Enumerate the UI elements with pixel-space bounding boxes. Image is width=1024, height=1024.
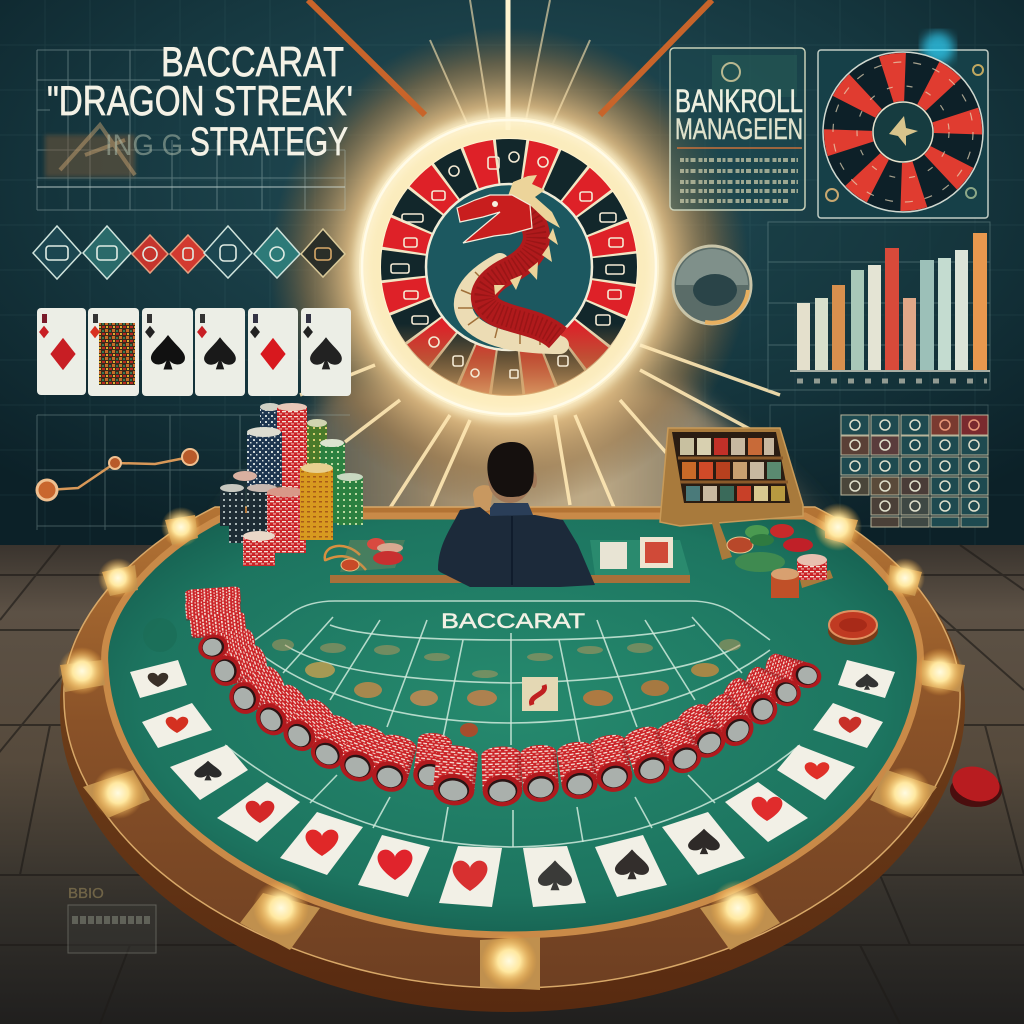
panel: bankroll management: BANKROLL xyxy=(675,83,803,119)
chip stacks left xyxy=(220,403,363,566)
glass orb xyxy=(673,246,751,324)
faint floor label xyxy=(68,885,156,953)
seated player xyxy=(330,442,690,587)
wooden chip tray right xyxy=(660,428,803,526)
schedule grid panel xyxy=(770,405,988,527)
betting layout markers xyxy=(272,639,741,737)
left grid panel behind title xyxy=(37,50,345,210)
title: STRATEGY xyxy=(190,120,348,164)
small card tray and right chips xyxy=(710,514,833,598)
floor xyxy=(0,545,1024,1024)
dragon xyxy=(457,175,560,345)
felt chips and cards left of player xyxy=(325,538,405,572)
faded dragon sketch behind title: ING G xyxy=(105,129,183,162)
betting layout xyxy=(225,601,800,847)
red chip on floor xyxy=(948,761,1004,807)
background grid pattern xyxy=(0,0,1024,545)
panel: bankroll management: MANAGEIEN xyxy=(675,113,803,146)
wheel segment labels xyxy=(391,152,624,378)
red chip roll arc xyxy=(185,586,824,807)
baccarat table xyxy=(60,507,965,1012)
rim lamps xyxy=(58,503,965,990)
table label: BACCARAT xyxy=(441,610,585,633)
wooden player board xyxy=(330,537,690,583)
faded dragon sketch behind title xyxy=(45,125,183,177)
panel: roulette wheel xyxy=(818,32,988,218)
loose red chip on felt xyxy=(828,611,878,645)
blurred body copy xyxy=(680,160,798,201)
card picture xyxy=(99,323,135,385)
wheel segments xyxy=(394,152,624,382)
title xyxy=(47,38,353,164)
card arc on table xyxy=(130,660,895,907)
diamond icons row xyxy=(33,226,345,279)
bar chart xyxy=(768,222,990,390)
playing cards row xyxy=(37,308,351,396)
panel: bankroll management xyxy=(670,48,805,210)
title: BACCARAT xyxy=(161,38,344,85)
background wall xyxy=(0,0,1024,560)
left line chart panel xyxy=(37,415,350,530)
dragon wheel xyxy=(361,119,657,415)
wheel glow and rays xyxy=(200,0,850,530)
title: "DRAGON STREAK' xyxy=(47,77,353,124)
faint floor label: BBIO xyxy=(68,885,104,902)
